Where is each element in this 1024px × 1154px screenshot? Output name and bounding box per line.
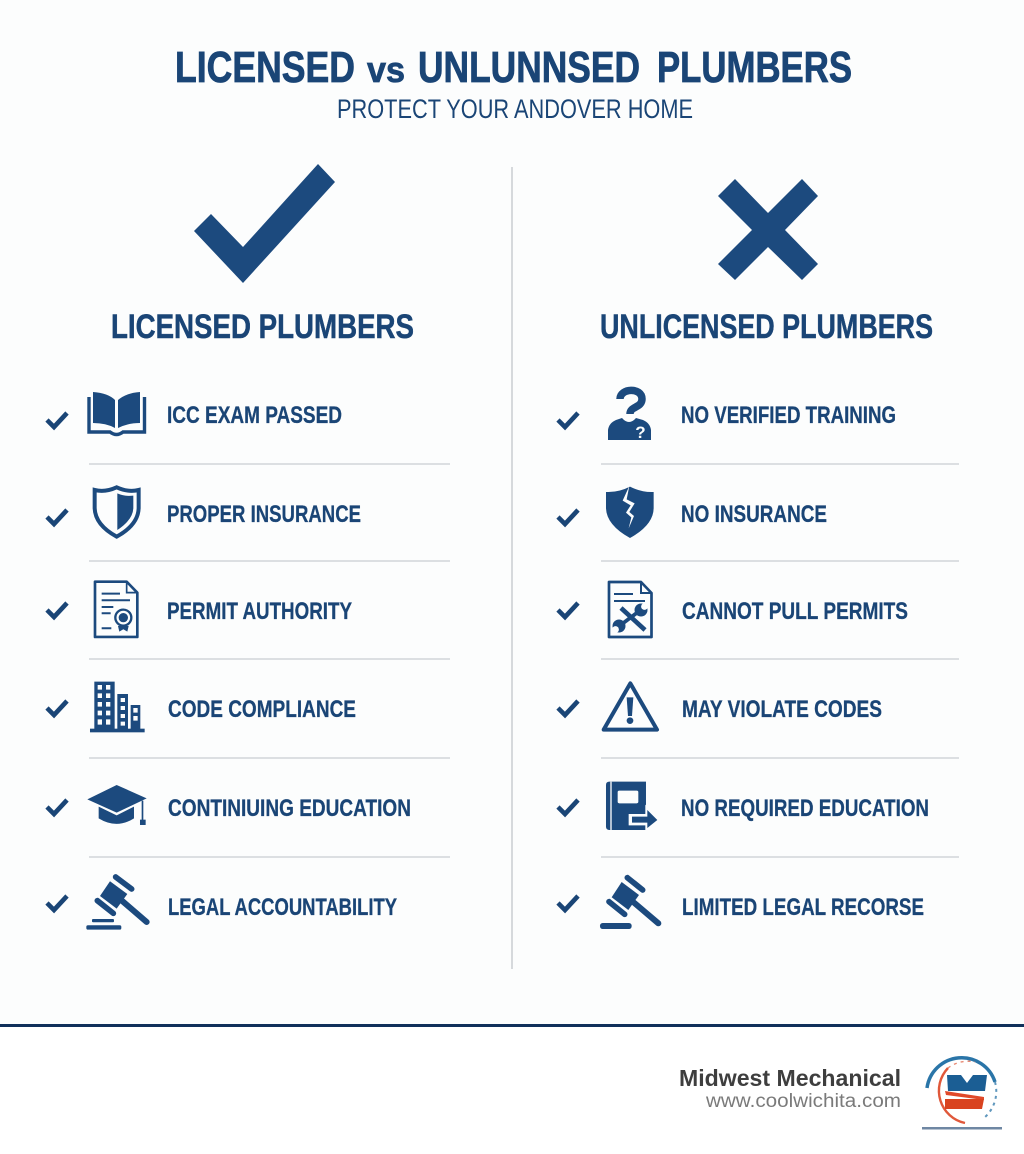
icon: gavel: [600, 878, 658, 929]
check: [47, 800, 67, 814]
icon: graduation cap: [87, 785, 147, 825]
row: code compliance: [47, 682, 356, 732]
panel: licensed plumbers: [47, 164, 450, 930]
check: [47, 510, 67, 524]
title: PLUMBERS: [657, 43, 852, 92]
check: [47, 413, 67, 427]
icon: gavel: [86, 877, 147, 930]
icon: document with tools: [609, 582, 652, 637]
check: [47, 603, 67, 617]
title: vs: [367, 49, 405, 90]
icon: book with arrow: [606, 782, 661, 832]
row: legal accountability: [47, 877, 397, 930]
icon: cracked shield: [606, 486, 654, 538]
row: permit authority: [47, 582, 352, 637]
check: [558, 701, 578, 715]
icon: large check mark: [194, 164, 335, 283]
icon: person with question mark: [608, 390, 651, 442]
label: CANNOT PULL PERMITS: [682, 598, 908, 625]
row: limited legal recourse: [558, 878, 924, 929]
icon: buildings: [90, 682, 145, 732]
icon: large X: [718, 179, 818, 280]
panel: unlicensed plumbers: [558, 179, 959, 929]
row: may violate codes: [558, 683, 882, 730]
label: CODE COMPLIANCE: [168, 696, 356, 723]
label: LIMITED LEGAL RECORSE: [682, 894, 924, 921]
subtitle: PROTECT YOUR ANDOVER HOME: [337, 94, 693, 124]
icon: certificate document: [95, 582, 137, 637]
title: [175, 43, 852, 92]
label: CONTINIUING EDUCATION: [168, 795, 411, 822]
row: continuing education: [47, 785, 411, 825]
heading: unlicensed plumbers: UNLICENSED PLUMBERS: [600, 308, 933, 346]
label: ICC EXAM PASSED: [167, 402, 342, 429]
label: PROPER INSURANCE: [167, 501, 361, 528]
footer brand text: Midwest Mechanical: [679, 1065, 901, 1091]
row: no verified training: [558, 390, 896, 442]
center divider: [511, 167, 513, 969]
label: NO INSURANCE: [681, 501, 827, 528]
footer rule: [0, 1024, 1024, 1027]
check: [47, 896, 67, 910]
row: no required education: [558, 782, 929, 832]
icon: warning triangle: [604, 683, 657, 730]
icon: person with question mark: ?: [635, 423, 646, 442]
check: [47, 701, 67, 715]
row: cannot pull permits: [558, 582, 908, 637]
footer brand text: www.coolwichita.com: [705, 1091, 901, 1112]
row: no insurance: [558, 486, 827, 538]
label: MAY VIOLATE CODES: [682, 696, 882, 723]
check: [558, 896, 578, 910]
check: [558, 413, 578, 427]
logo: [922, 1058, 1002, 1130]
footer brand text: [679, 1065, 901, 1112]
label: NO REQUIRED EDUCATION: [681, 795, 929, 822]
label: PERMIT AUTHORITY: [167, 598, 352, 625]
check: [558, 800, 578, 814]
title: LICENSED: [175, 43, 355, 92]
label: NO VERIFIED TRAINING: [681, 402, 896, 429]
heading: licensed plumbers: LICENSED PLUMBERS: [111, 308, 414, 346]
label: LEGAL ACCOUNTABILITY: [168, 894, 397, 921]
check: [558, 510, 578, 524]
check: [558, 603, 578, 617]
icon: open book: [89, 392, 144, 434]
row: ICC exam passed: [47, 392, 342, 434]
row: proper insurance: [47, 487, 361, 537]
icon: half shield: [95, 487, 139, 537]
title: UNLUNNSED: [418, 43, 640, 92]
